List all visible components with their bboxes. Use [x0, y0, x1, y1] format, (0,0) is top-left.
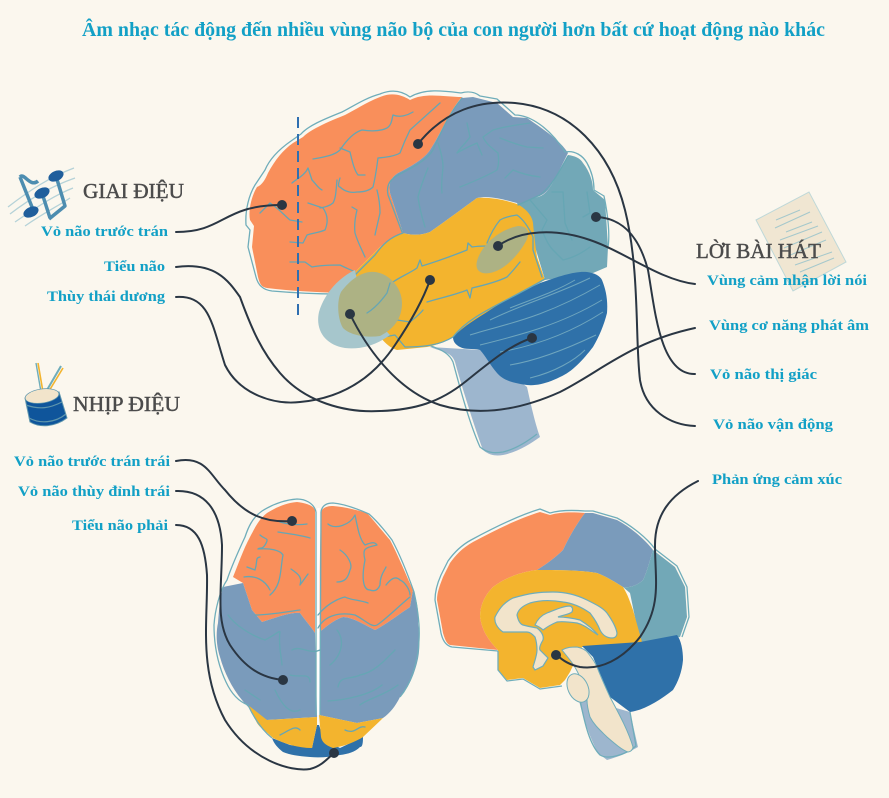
cerebellum folds [470, 278, 603, 378]
sagittal brain [435, 509, 689, 760]
left labels: Thùy thái dương [47, 289, 166, 305]
left labels: Vỏ não thùy đỉnh trái [18, 484, 170, 500]
corpus callosum [495, 592, 617, 670]
temporal lobe [340, 198, 545, 350]
frontal [437, 512, 585, 650]
temporal sulci [387, 243, 520, 330]
connector wires [176, 102, 698, 769]
left labels: Tiểu não phải [72, 518, 168, 534]
cerebellum strip [272, 725, 363, 757]
brain stem [430, 347, 540, 455]
parietal sulci [418, 123, 543, 227]
icon: music notes [8, 168, 75, 226]
left labels: Vỏ não trước trán trái [14, 454, 170, 470]
icon: lyrics sheet [756, 192, 846, 291]
parietal [537, 513, 653, 587]
side brain [246, 91, 609, 455]
connector dots [277, 139, 601, 758]
right labels: Vùng cảm nhận lời nói [707, 273, 867, 289]
dashed frontal line [297, 117, 299, 319]
parietal right [318, 590, 419, 723]
Broca area [338, 272, 402, 337]
occipital sulci [530, 192, 590, 260]
parietal left [217, 583, 317, 720]
left labels: Vỏ não trước trán [41, 224, 169, 240]
frontal left [233, 502, 315, 633]
sagittal outline [435, 509, 585, 651]
parietal lobe [389, 97, 568, 235]
brain stem back [578, 697, 638, 760]
title: Âm nhạc tác động đến nhiều vùng não bộ của con người hơn bất cứ hoạt động nào khác [82, 17, 825, 41]
silhouette outline [246, 91, 461, 294]
heading: melody: GIAI ĐIỆU [83, 179, 184, 203]
top-view outline [214, 499, 316, 738]
Wernicke area [476, 226, 528, 273]
left labels [14, 224, 170, 534]
left labels: Tiểu não [104, 259, 165, 275]
motor/speech highlight [318, 270, 390, 348]
right labels: Vỏ não thị giác [710, 367, 817, 383]
right labels: Vỏ não vận động [713, 417, 834, 433]
occipital [623, 550, 687, 642]
right labels: Phản ứng cảm xúc [712, 472, 842, 488]
frontal right [318, 506, 413, 633]
stem cream [562, 647, 633, 752]
top-view brain [214, 499, 419, 757]
limbic yellow [480, 570, 642, 688]
icon: drum [24, 363, 67, 426]
occipital lobe [517, 155, 608, 280]
cerebellum [453, 272, 607, 385]
top-view sulci [244, 515, 410, 628]
right labels [707, 273, 870, 488]
heading: lyrics: LỜI BÀI HÁT [696, 239, 821, 263]
occipital left [248, 705, 317, 748]
fornix [535, 606, 598, 635]
heading: rhythm: NHỊP ĐIỆU [73, 392, 180, 416]
pons [563, 670, 593, 706]
midline gap [317, 508, 320, 715]
frontal sulci [260, 103, 440, 272]
right labels: Vùng cơ năng phát âm [709, 318, 870, 334]
cerebellum [582, 635, 683, 712]
frontal lobe [249, 94, 462, 293]
occipital right [319, 715, 383, 748]
